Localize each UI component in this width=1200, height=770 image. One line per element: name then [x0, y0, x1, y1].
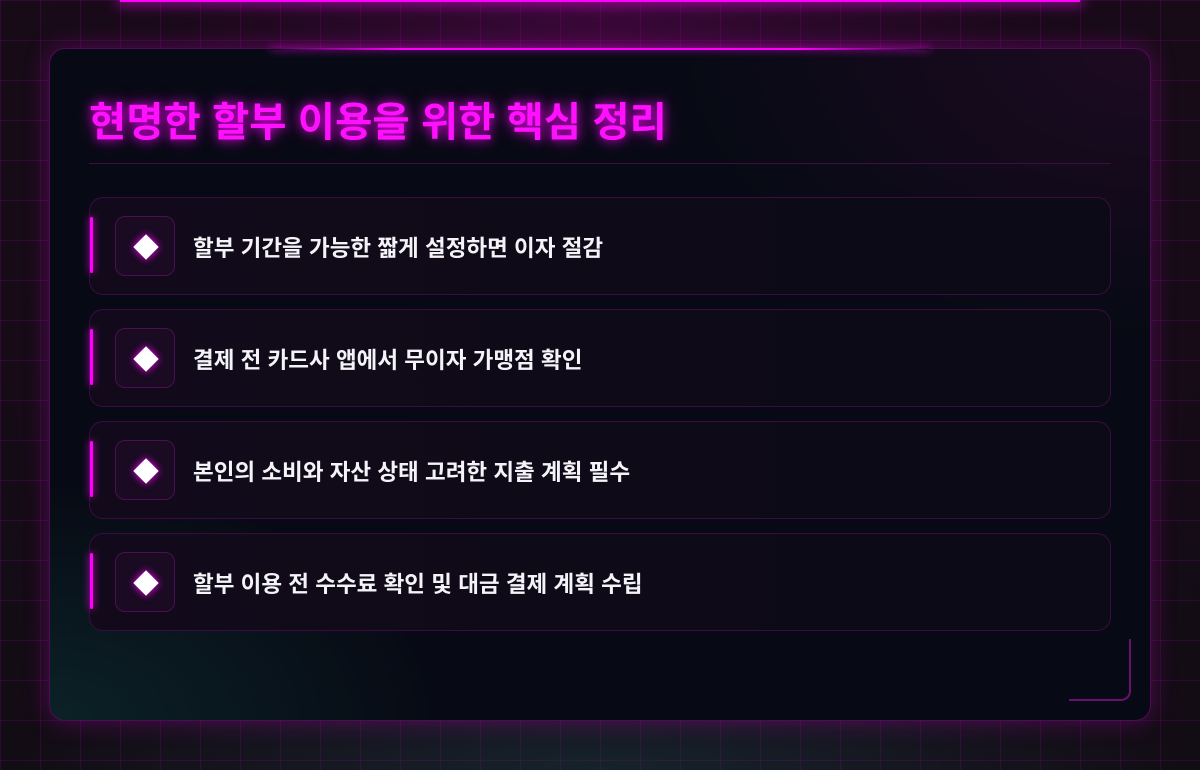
title: 현명한 할부 이용을 위한 핵심 정리 — [89, 99, 667, 145]
item 1 — [89, 197, 1111, 295]
corner bracket — [1069, 639, 1131, 701]
item 2 — [89, 309, 1111, 407]
icon: diamond — [115, 328, 175, 388]
text 3: 본인의 소비와 자산 상태 고려한 지출 계획 필수 — [193, 460, 630, 485]
item 3 — [89, 421, 1111, 519]
icon: diamond — [115, 440, 175, 500]
text 1: 할부 기간을 가능한 짧게 설정하면 이자 절감 — [193, 236, 603, 261]
text 2: 결제 전 카드사 앱에서 무이자 가맹점 확인 — [193, 348, 582, 373]
text 4: 할부 이용 전 수수료 확인 및 대금 결제 계획 수립 — [193, 572, 643, 597]
item 4 — [89, 533, 1111, 631]
icon: diamond — [115, 216, 175, 276]
icon: diamond — [115, 552, 175, 612]
